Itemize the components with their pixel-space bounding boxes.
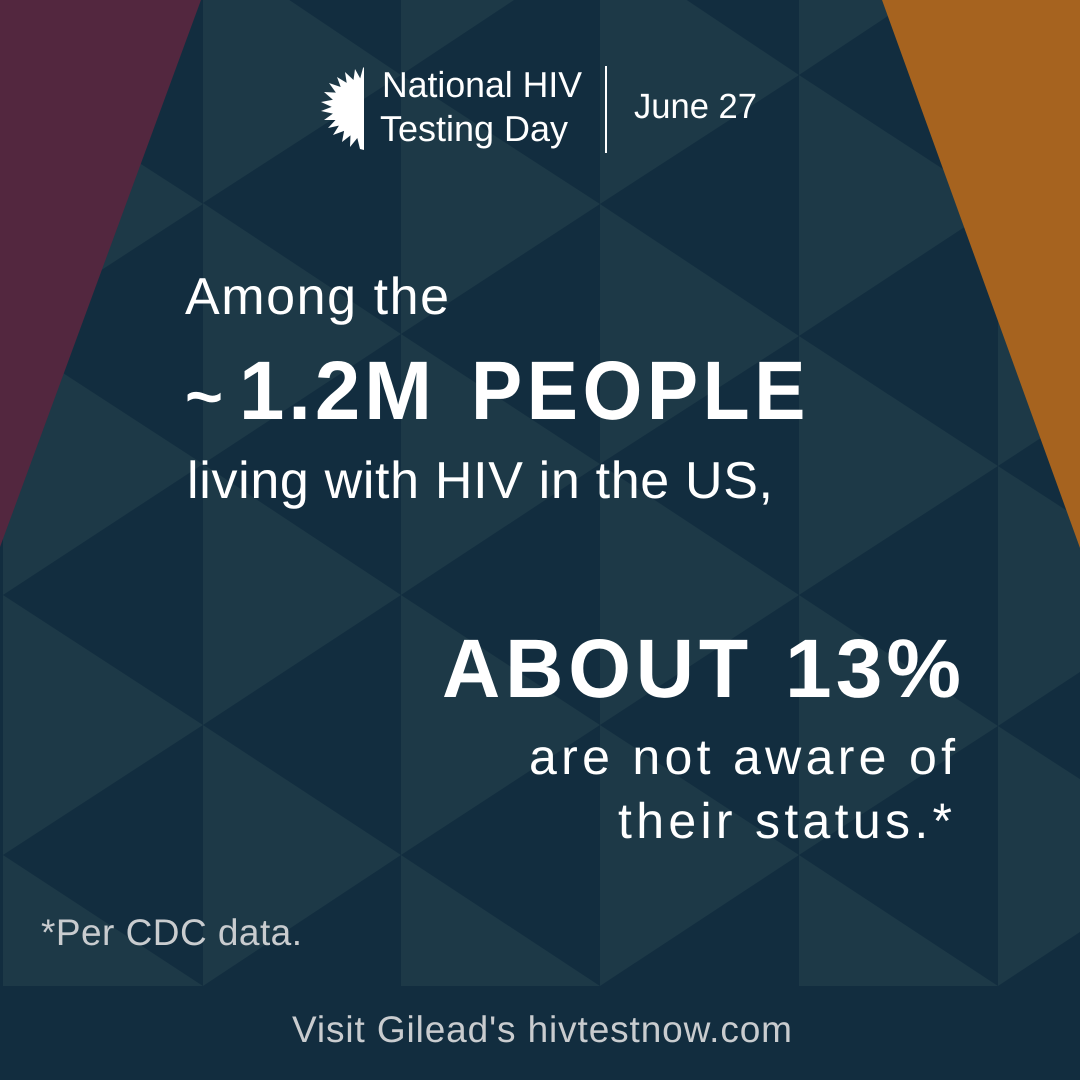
- icon: half sun: [321, 67, 364, 150]
- header logo: [321, 64, 757, 153]
- event name: Testing Day: [380, 108, 568, 149]
- headline: 1.2M people: ~: [185, 359, 223, 433]
- event name: [380, 64, 582, 149]
- text: not aware of status: [529, 729, 955, 849]
- event name: National HIV: [382, 64, 582, 105]
- text: not aware of status: their status.*: [618, 793, 952, 849]
- headline: about 13%: ABOUT: [442, 622, 753, 715]
- headline: 1.2M people: PEOPLE: [471, 344, 810, 437]
- maroon corner shape: [0, 0, 201, 547]
- website call to action: Visit Gilead's hivtestnow.com: [292, 1009, 792, 1050]
- headline: about 13%: [442, 622, 965, 715]
- footer band: [0, 986, 1080, 1080]
- text: living with HIV: living with HIV in the US,: [187, 452, 773, 510]
- footnote: *Per CDC data.: [41, 912, 302, 953]
- orange corner shape: [882, 0, 1080, 548]
- intro text: Among the: [185, 268, 449, 326]
- headline: 1.2M people: 1.2M: [239, 344, 436, 437]
- headline: 1.2M people: [185, 344, 810, 437]
- divider: [605, 66, 607, 153]
- date: June 27: [634, 87, 757, 126]
- headline: about 13%: 13%: [785, 622, 965, 715]
- text: not aware of status: are not aware of: [529, 729, 955, 785]
